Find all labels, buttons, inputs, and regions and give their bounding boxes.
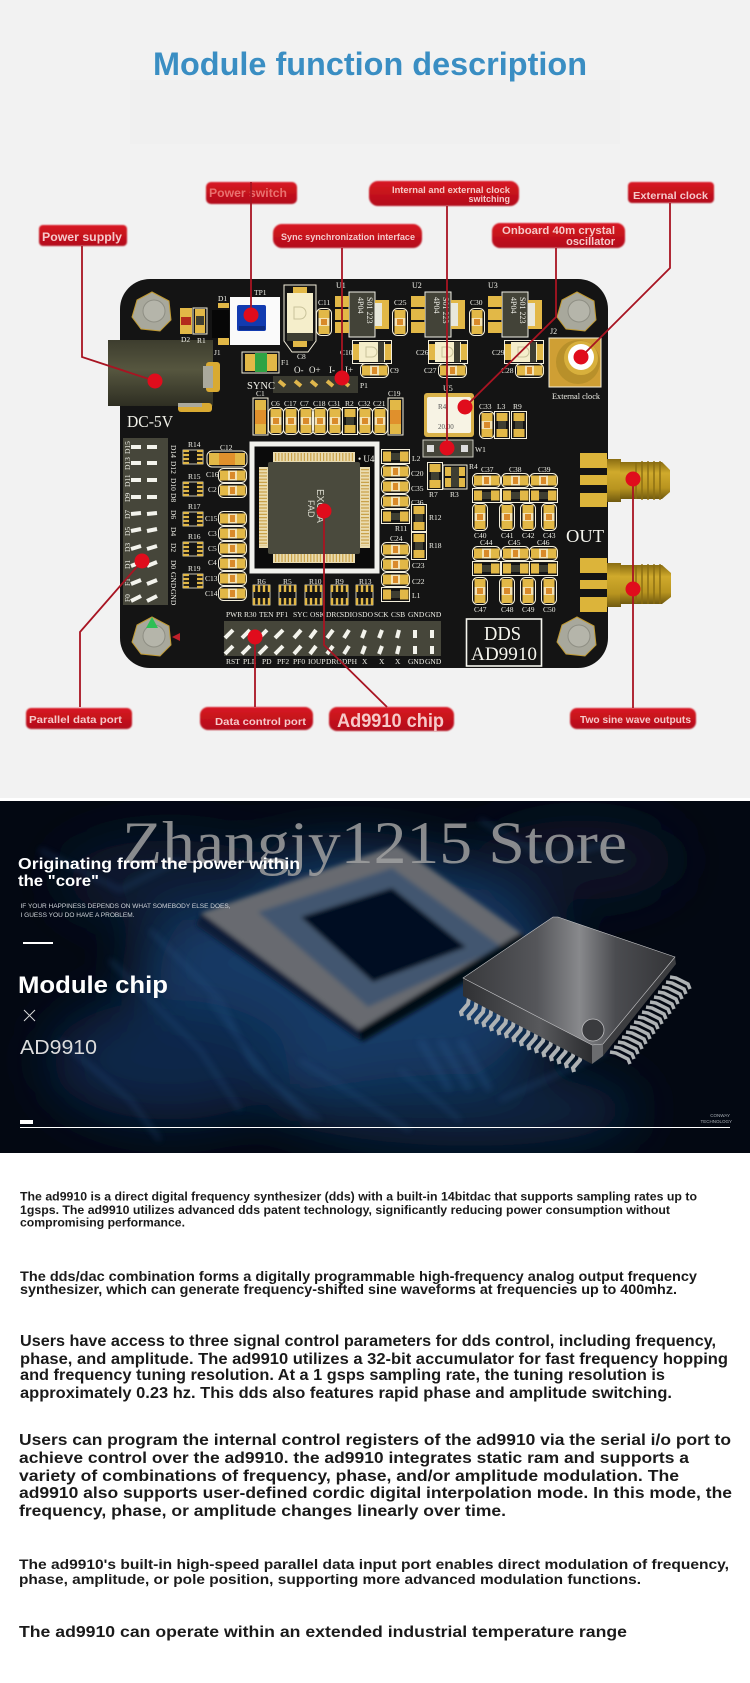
bottom resistor networks: R9	[335, 577, 344, 586]
capacitors around regulators: C25	[394, 298, 407, 307]
chip socket ring	[196, 845, 530, 1042]
regulators U1 U2 U3: 4P04	[356, 297, 365, 313]
data control port header: GND	[408, 657, 425, 666]
bottom resistor networks: R10	[309, 577, 322, 586]
AD9910 main chip: • U4	[358, 454, 375, 464]
crystal oscillator: U5	[443, 384, 453, 393]
power jack: DC-5V	[127, 412, 174, 431]
bottom resistor networks: R13	[359, 577, 372, 586]
callout: power switch: Power switch	[209, 186, 287, 200]
capacitor column right of chip: R3	[450, 490, 459, 499]
regulators U1 U2 U3	[335, 281, 542, 337]
panel: dark chip banner	[0, 801, 750, 1153]
parallel data port header: D4	[169, 527, 178, 536]
capacitor column right of chip: R11	[395, 524, 407, 533]
external clock connector: J2	[550, 327, 557, 336]
text: paragraph 4: variety of combinations of frequency, phase, and/or amplitude modulation. The	[19, 1468, 679, 1485]
callout: power supply: Power supply	[42, 232, 123, 244]
data control port header: CSB	[391, 610, 405, 619]
output capacitors grid: C50	[543, 605, 556, 614]
capacitor column right of chip: R12	[429, 513, 442, 522]
capacitor column right of chip	[382, 450, 478, 602]
callout leader lines	[80, 182, 670, 708]
power jack: J1	[214, 348, 221, 357]
capacitors around regulators: C9	[390, 366, 399, 375]
crystal oscillator: C33	[479, 402, 492, 411]
text: paragraph 5	[19, 1556, 729, 1587]
callout: sync synchronization interface: Sync synchronization interface	[281, 232, 415, 243]
data control port header: SCK	[374, 610, 389, 619]
sync header: SYNC	[247, 381, 275, 392]
output capacitors grid: C49	[522, 605, 535, 614]
data control port header: OSK	[310, 610, 326, 619]
decoupling capacitor row	[253, 389, 403, 435]
regulators U1 U2 U3: 4P04	[432, 297, 441, 313]
capacitors around regulators: C29	[492, 348, 505, 357]
power switch	[180, 288, 280, 345]
bottom resistor networks: R5	[283, 577, 292, 586]
left capacitor column: C15	[205, 514, 218, 523]
parallel data port header: F0	[123, 594, 132, 602]
board outline	[120, 279, 608, 668]
text: paragraph 4: Users can program the internal control registers of the ad9910 via the serial i/o port to	[19, 1432, 731, 1449]
regulators U1 U2 U3: S01 223	[441, 297, 450, 323]
power jack	[108, 340, 221, 431]
callout: ad9910 chip: Ad9910 chip	[337, 711, 444, 732]
banner small caption: I GUESS YOU DO HAVE A PROBLEM.	[20, 913, 135, 919]
sync header	[247, 365, 368, 393]
resistor networks: R17	[188, 502, 201, 511]
capacitor column right of chip: C24	[390, 534, 403, 543]
text: paragraph 1	[20, 1190, 697, 1230]
sync header: I+	[345, 365, 353, 375]
callout: power switch	[206, 182, 297, 204]
decoupling capacitor row: C6	[271, 399, 280, 408]
data control port header: GND	[425, 657, 442, 666]
banner heading: the "core"	[18, 873, 99, 890]
power switch: TP1	[254, 288, 267, 297]
text: paragraph 4: achieve control over the ad9910. the ad9910 integrates static ram and supports a	[19, 1450, 689, 1467]
text: paragraph 1: compromising performance.	[20, 1216, 185, 1230]
capacitor column right of chip: C36	[411, 498, 424, 507]
output capacitors grid: C37	[481, 465, 494, 474]
module chip heading: Module chip	[18, 972, 168, 999]
progress marker and rule	[20, 1120, 730, 1128]
output capacitors grid: C42	[522, 531, 535, 540]
data control port header: SDO	[358, 610, 374, 619]
text: paragraph 2: synthesizer, which can generate frequency-shifted sine waveforms at frequencies up to 400mhz.	[20, 1282, 677, 1297]
capacitor column right of chip: L1	[412, 591, 421, 600]
text: paragraph 1: The ad9910 is a direct digital frequency synthesizer (dds) with a built-in 14bitdac that supports sampling rates up to	[20, 1190, 697, 1204]
parallel data port header: D10	[169, 478, 178, 491]
faint smudge below title	[130, 80, 620, 144]
output capacitors grid: C43	[543, 531, 556, 540]
external clock connector	[549, 327, 601, 401]
text: paragraph 3	[20, 1333, 728, 1402]
parallel data port header: D12	[169, 461, 178, 474]
output capacitors grid: C45	[508, 538, 521, 547]
capacitor column right of chip: C23	[412, 561, 425, 570]
left capacitor column: C13	[205, 574, 218, 583]
decoupling capacitor row: C32	[358, 399, 371, 408]
chip illustration	[461, 917, 690, 1072]
text: paragraph 2: The dds/dac combination forms a digitally programmable high-frequency analog output frequency	[20, 1269, 698, 1284]
parallel data port header: D7	[123, 510, 132, 519]
callout: two sine wave outputs: Two sine wave outputs	[580, 715, 691, 726]
callout: onboard crystal oscillator: oscillator	[566, 236, 616, 248]
regulators U1 U2 U3: S01 223	[518, 297, 527, 323]
callout: power supply	[39, 225, 127, 246]
banner small caption: IF YOUR HAPPINESS DEPENDS ON WHAT SOMEBODY ELSE DOES,	[20, 904, 231, 910]
parallel data port header: D14	[169, 445, 178, 458]
text: paragraph 5: phase, amplitude, or pole position, supporting more advanced modulation functions.	[19, 1571, 641, 1587]
bottom resistor networks	[253, 577, 373, 605]
resistor networks: R16	[188, 532, 201, 541]
conway technology tag: TECHNOLOGY	[700, 1119, 732, 1124]
text: paragraph 1: 1gsps. The ad9910 utilizes advanced dds patent technology, significantly reducing power consumption without	[20, 1203, 670, 1217]
decoupling capacitor row: C21	[373, 399, 386, 408]
resistor networks: R15	[188, 472, 201, 481]
DDS AD9910 silkscreen box	[466, 619, 542, 666]
power switch: D2	[181, 335, 190, 344]
parallel data port header: D13	[123, 457, 132, 470]
data control port header: SYC	[293, 610, 308, 619]
parallel data port header: D11	[123, 474, 132, 487]
AD9910 main chip	[252, 444, 377, 571]
SMA output connectors	[580, 453, 671, 612]
callout: onboard crystal oscillator	[492, 223, 625, 248]
parallel data port header: GND	[169, 589, 178, 606]
tantalum capacitor C8	[284, 285, 316, 361]
fuse	[242, 352, 289, 373]
capacitors around regulators: C10	[340, 348, 353, 357]
text: paragraph 3: approximately 0.23 hz. This dds also features rapid phase and amplitude switching.	[20, 1385, 672, 1402]
callout dots	[134, 308, 640, 644]
callout: parallel data port: Parallel data port	[29, 714, 123, 726]
clock switching jumper	[423, 440, 486, 457]
parallel data port header: F1	[123, 578, 132, 586]
AD9910 main chip: EXCXA	[314, 489, 325, 523]
data control port header: PF0	[293, 657, 305, 666]
parallel data port header: D9	[123, 493, 132, 502]
output capacitors grid: C38	[509, 465, 522, 474]
parallel data port header: D3	[123, 543, 132, 552]
parallel data port header: D2	[169, 543, 178, 552]
callout: external clock	[628, 182, 714, 203]
output capacitors grid: C39	[538, 465, 551, 474]
regulators U1 U2 U3: 4P04	[509, 297, 518, 313]
parallel data port header: D8	[169, 493, 178, 502]
parallel data port header: D0	[169, 560, 178, 569]
decoupling capacitor row: C1	[256, 389, 265, 398]
callout: external clock: External clock	[633, 190, 708, 202]
banner background	[0, 801, 750, 1153]
data control port header	[224, 610, 442, 666]
data control port header: DRO	[326, 657, 342, 666]
data control port header: PF1	[276, 610, 288, 619]
left capacitor column	[205, 443, 247, 600]
capacitors around regulators: C11	[318, 298, 330, 307]
crystal oscillator: R4	[438, 403, 447, 411]
callout: parallel data port	[26, 708, 132, 729]
output capacitors grid: C48	[501, 605, 514, 614]
DDS AD9910 silkscreen box: DDS	[484, 623, 521, 645]
short divider	[23, 942, 53, 944]
callout: data control port: Data control port	[215, 716, 307, 728]
data control port header: GND	[408, 610, 425, 619]
cross icon	[24, 1010, 35, 1021]
text: paragraph 4	[19, 1432, 732, 1520]
parallel data port header: GND	[169, 572, 178, 589]
capacitor column right of chip: C35	[411, 484, 424, 493]
sync header: P1	[360, 381, 368, 390]
regulators U1 U2 U3: U1	[336, 281, 346, 290]
capacitor column right of chip: C20	[411, 469, 424, 478]
OUT label: OUT	[566, 526, 604, 546]
data control port header: GND	[425, 610, 442, 619]
output capacitors grid: C40	[474, 531, 487, 540]
data control port header: X	[362, 657, 368, 666]
sync header: O+	[309, 365, 321, 375]
text: paragraph 4: ad9910 also supports user-defined cordic digital interpolation mode. In this mode, the	[19, 1485, 732, 1502]
data control port header: DPH	[342, 657, 358, 666]
text: paragraph 6: The ad9910 can operate within an extended industrial temperature range	[19, 1624, 627, 1641]
resistor networks: R19	[188, 564, 201, 573]
power switch: R1	[197, 336, 206, 345]
regulators U1 U2 U3: S01 223	[365, 297, 374, 323]
output capacitors grid: C44	[480, 538, 493, 547]
callout: internal and external clock switching: Internal and external clock	[392, 185, 511, 195]
mounting holes	[132, 292, 596, 656]
blurred pcb traces	[40, 820, 620, 1140]
output capacitors grid: C47	[474, 605, 487, 614]
banner heading: Originating from the power within	[18, 856, 300, 873]
regulators U1 U2 U3: U3	[488, 281, 498, 290]
data control port header: X	[395, 657, 401, 666]
data control port header: PD	[262, 657, 272, 666]
resistor networks: R14	[188, 440, 201, 449]
text: paragraph 2	[20, 1269, 698, 1297]
panel: circuit board	[108, 279, 671, 668]
data control port header: PF2	[277, 657, 289, 666]
decoupling capacitor row: C7	[300, 399, 309, 408]
sync header: O-	[294, 365, 304, 375]
output capacitors grid: C46	[537, 538, 550, 547]
fuse: F1	[281, 358, 289, 367]
AD9910 label: AD9910	[20, 1037, 97, 1059]
left capacitor column: C5	[208, 544, 217, 553]
banner heading	[18, 858, 299, 886]
left capacitor column: C3	[208, 529, 217, 538]
left capacitor column: C4	[208, 558, 217, 567]
panel: module function description background	[0, 0, 750, 798]
text: paragraph 3: phase, and amplitude. The ad9910 utilizes a 32-bit accumulator for fast frequency hopping	[20, 1351, 728, 1368]
decoupling capacitor row: C31	[328, 399, 341, 408]
conway technology tag: CONWAY	[710, 1113, 730, 1118]
DDS AD9910 silkscreen box: AD9910	[471, 644, 537, 665]
bottom resistor networks: R6	[257, 577, 266, 586]
decoupling capacitor row: C19	[388, 389, 401, 398]
watermark: Zhangjy1215 Store	[122, 810, 627, 876]
capacitor column right of chip: R7	[429, 490, 438, 499]
left capacitor column: C14	[205, 589, 218, 598]
text: paragraph 5: The ad9910's built-in high-speed parallel data input port enables direct modulation of frequency,	[19, 1556, 729, 1572]
capacitors around regulators: C27	[424, 366, 437, 375]
data control port header: IOUP	[308, 657, 326, 666]
parallel data port header: D5	[123, 527, 132, 536]
capacitors around regulators	[316, 298, 544, 378]
crystal oscillator: L3	[497, 402, 506, 411]
output capacitors grid	[472, 465, 558, 614]
blue pcb glow	[50, 820, 680, 1146]
left capacitor column: C16	[206, 470, 219, 479]
data control port header: DRC	[326, 610, 341, 619]
data control port header: SDIO	[340, 610, 358, 619]
power switch: D1	[218, 294, 227, 303]
banner small caption	[21, 904, 230, 917]
left capacitor column: C2	[208, 485, 217, 494]
crystal oscillator	[424, 384, 526, 438]
text: paragraph 3: and frequency tuning resolution. At a 1 gsps sampling rate, the tuning resolution is	[20, 1367, 665, 1384]
callout: sync synchronization interface	[273, 224, 422, 248]
crystal oscillator: R9	[513, 402, 522, 411]
text: paragraph 3: Users have access to three signal control parameters for dds control, including frequency,	[20, 1333, 716, 1350]
clock switching jumper: W1	[475, 445, 486, 454]
crystal oscillator: 20.00	[438, 423, 454, 431]
regulators U1 U2 U3: U2	[412, 281, 422, 290]
capacitors around regulators: C28	[501, 366, 514, 375]
output capacitors grid: C41	[501, 531, 514, 540]
tantalum capacitor C8: C8	[297, 352, 306, 361]
capacitor column right of chip: C22	[412, 577, 425, 586]
external clock connector: External clock	[552, 392, 600, 401]
parallel data port header: D1	[123, 560, 132, 569]
conway technology tag	[700, 1114, 732, 1123]
parallel data port header: D6	[169, 510, 178, 519]
resistor networks	[183, 440, 203, 588]
callout: two sine wave outputs	[570, 708, 696, 729]
data control port header: RST	[226, 657, 240, 666]
data control port header: R30	[244, 610, 257, 619]
data control port header: PLL	[243, 657, 257, 666]
callout: internal and external clock switching	[369, 181, 519, 206]
decoupling capacitor row: R2	[345, 399, 354, 408]
callout: internal and external clock switching: switching	[468, 194, 510, 204]
text: paragraph 4: frequency, phase, or amplitude changes linearly over time.	[19, 1503, 506, 1520]
data control port header: PWR	[226, 610, 242, 619]
capacitor column right of chip: R18	[429, 541, 442, 550]
sync header: I-	[329, 365, 335, 375]
capacitors around regulators: C26	[416, 348, 429, 357]
parallel data port header: D15	[123, 441, 132, 454]
data control port header: TEN	[259, 610, 274, 619]
data control port header: X	[379, 657, 385, 666]
decoupling capacitor row: C18	[313, 399, 326, 408]
callout: onboard crystal oscillator: Onboard 40m crystal	[502, 225, 615, 237]
capacitors around regulators: C30	[470, 298, 483, 307]
capacitor column right of chip: L2	[412, 454, 421, 463]
left capacitor column: C12	[220, 443, 233, 452]
callout: data control port	[200, 707, 313, 730]
decoupling capacitor row: C17	[284, 399, 297, 408]
AD9910 main chip: FAD	[306, 500, 316, 518]
capacitor column right of chip: R4	[469, 462, 478, 471]
title: Module function description	[153, 46, 587, 82]
parallel data port header	[123, 438, 178, 606]
